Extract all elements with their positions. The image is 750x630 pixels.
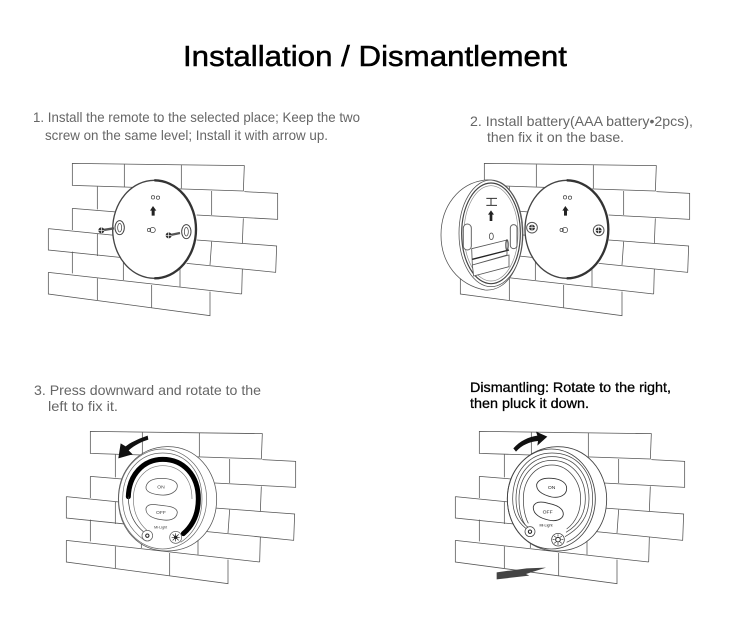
illustration: remote being removed <box>455 431 685 584</box>
dismantling instructions: then pluck it down. <box>470 395 589 411</box>
panel: dismantling <box>455 379 685 584</box>
step 1 instructions <box>33 109 360 143</box>
illustration: remote fixed on wall: OFF <box>156 510 166 516</box>
step 2 instructions: then fix it on the base. <box>487 129 624 145</box>
panel: step 3 <box>34 382 296 584</box>
panel: step 1 <box>33 109 360 316</box>
arrow: pull down <box>497 568 546 579</box>
illustration: remote being removed: Mi·Light <box>539 523 553 527</box>
step 3 instructions <box>34 382 261 414</box>
illustration: remote fixed on wall: Mi·Light <box>154 526 167 530</box>
illustration: remote fixed on wall: ON <box>157 485 165 491</box>
illustration: remote being removed: ON <box>548 485 556 491</box>
illustration: base plate on brick wall <box>48 163 278 316</box>
step 1 instructions: screw on the same level; Install it with arrow up. <box>45 127 328 143</box>
dismantling instructions <box>470 379 671 411</box>
illustration: open remote with batteries <box>441 163 690 316</box>
step 2 instructions: 2. Install battery(AAA battery•2pcs), <box>470 113 693 129</box>
dismantling instructions: Dismantling: Rotate to the right, <box>470 379 671 395</box>
step 3 instructions: left to fix it. <box>48 398 118 414</box>
title: Installation / Dismantlement <box>183 41 567 73</box>
illustration: remote being removed: OFF <box>543 509 553 515</box>
arrow: rotate left <box>118 436 148 458</box>
step 2 instructions <box>470 113 693 145</box>
step 3 instructions: 3. Press downward and rotate to the <box>34 382 261 398</box>
step 1 instructions: 1. Install the remote to the selected place; Keep the two <box>33 109 360 125</box>
arrow: rotate right <box>513 432 547 452</box>
panel: step 2 <box>441 113 693 316</box>
illustration: remote fixed on wall <box>66 431 296 584</box>
